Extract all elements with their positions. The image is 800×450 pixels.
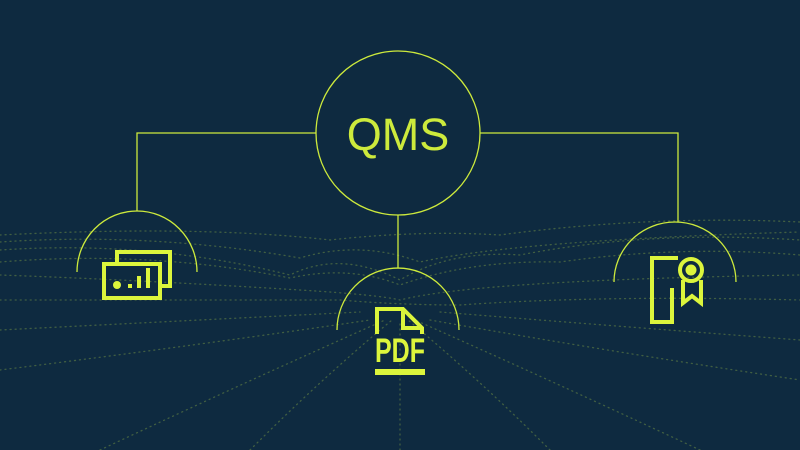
connector lines <box>137 133 678 268</box>
icon: PDF document: PDF <box>375 332 425 370</box>
arc: left <box>77 211 197 272</box>
icon: PDF document <box>375 309 425 375</box>
icon: certificate <box>652 258 702 322</box>
icon: report cards <box>104 252 170 298</box>
central circle: QMS: QMS <box>347 109 449 160</box>
arc: right <box>614 222 736 282</box>
central circle: QMS <box>316 51 480 215</box>
arc: middle <box>337 268 459 330</box>
